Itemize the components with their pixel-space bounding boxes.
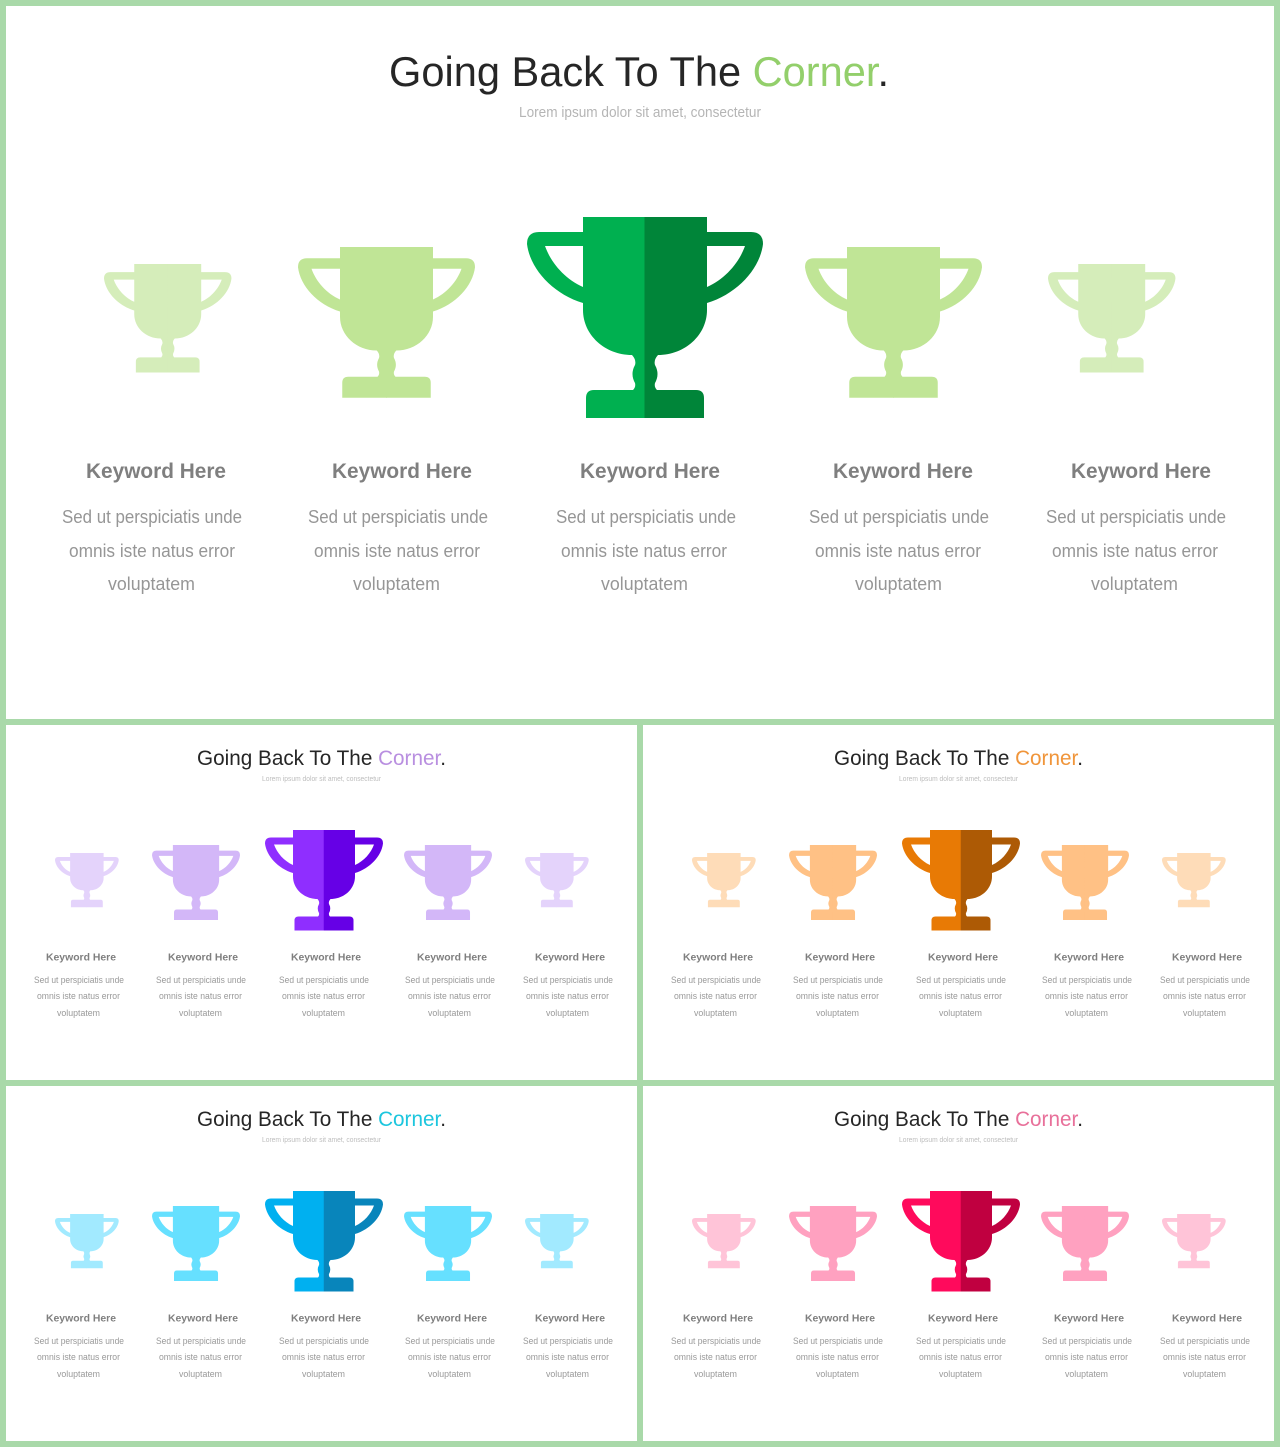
icon: large trophy centre xyxy=(265,830,383,930)
text block: column 4: Keyword Here xyxy=(1054,952,1124,964)
text block: column 3: Sed ut perspiciatis unde xyxy=(279,975,369,985)
icon: small trophy left xyxy=(692,1214,756,1268)
subtitle: Lorem ipsum dolor sit amet, consectetur xyxy=(899,1135,1018,1144)
text block: column 3: omnis iste natus error xyxy=(561,540,727,561)
text block: column 5: voluptatem xyxy=(546,1008,589,1018)
text block: column 1: voluptatem xyxy=(57,1369,100,1379)
text block: column 3 xyxy=(556,460,736,594)
text block: column 3 xyxy=(279,952,369,1018)
text block: column 5: omnis iste natus error xyxy=(1163,1352,1246,1362)
text block: column 5: Keyword Here xyxy=(535,952,605,964)
text block: column 2: Keyword Here xyxy=(168,952,238,964)
text block: column 2: omnis iste natus error xyxy=(796,991,879,1001)
icon: medium trophy left xyxy=(789,845,877,920)
text block: column 4 xyxy=(1042,1312,1132,1379)
text block: column 4: omnis iste natus error xyxy=(1045,1352,1128,1362)
text block: column 1: omnis iste natus error xyxy=(69,540,235,561)
text block: column 4: Keyword Here xyxy=(417,1312,487,1324)
text block: column 3: Sed ut perspiciatis unde xyxy=(916,1336,1006,1346)
text block: column 2: Keyword Here xyxy=(168,1312,238,1324)
text block: column 2: Keyword Here xyxy=(332,460,472,483)
text block: column 4 xyxy=(809,460,989,594)
text block: column 3: omnis iste natus error xyxy=(282,991,365,1001)
text block: column 4: omnis iste natus error xyxy=(408,1352,491,1362)
text block: column 1: Sed ut perspiciatis unde xyxy=(671,1336,761,1346)
text block: column 3: omnis iste natus error xyxy=(919,991,1002,1001)
panel: main green slide xyxy=(6,6,1274,719)
icon: medium trophy left xyxy=(298,247,475,398)
title: Going Back To The Corner. xyxy=(389,48,889,95)
text block: column 3: Keyword Here xyxy=(291,1312,361,1324)
text block: column 2: voluptatem xyxy=(353,573,440,594)
text block: column 4 xyxy=(405,1312,495,1379)
text block: column 4: Keyword Here xyxy=(833,460,973,483)
text block: column 3: Keyword Here xyxy=(580,460,720,483)
text block: column 5: Keyword Here xyxy=(535,1312,605,1324)
text block: column 2 xyxy=(156,1312,246,1379)
text block: column 1: Keyword Here xyxy=(46,1312,116,1324)
text block: column 4 xyxy=(405,952,495,1018)
panel: purple slide xyxy=(6,725,637,1080)
text block: column 2: voluptatem xyxy=(816,1008,859,1018)
text block: column 3 xyxy=(916,952,1006,1018)
text block: column 1 xyxy=(671,1312,761,1379)
text block: column 2: voluptatem xyxy=(179,1369,222,1379)
icon: medium trophy left xyxy=(789,1206,877,1281)
text block: column 1: Sed ut perspiciatis unde xyxy=(34,975,124,985)
text block: column 1: Keyword Here xyxy=(86,460,226,483)
icon: small trophy right xyxy=(1162,853,1226,907)
text block: column 4: voluptatem xyxy=(1065,1369,1108,1379)
title: Going Back To The Corner. xyxy=(197,747,446,770)
text block: column 3: omnis iste natus error xyxy=(282,1352,365,1362)
panel: orange slide xyxy=(643,725,1274,1080)
text block: column 4: omnis iste natus error xyxy=(815,540,981,561)
text block: column 4: Sed ut perspiciatis unde xyxy=(405,1336,495,1346)
text block: column 2 xyxy=(793,952,883,1018)
icon: large trophy centre xyxy=(902,1191,1020,1292)
text block: column 5 xyxy=(1046,460,1226,594)
icon: large trophy centre xyxy=(527,217,763,418)
text block: column 3: Keyword Here xyxy=(291,952,361,964)
text block: column 1: omnis iste natus error xyxy=(674,991,757,1001)
text block: column 4: Sed ut perspiciatis unde xyxy=(1042,1336,1132,1346)
text block: column 3 xyxy=(916,1312,1006,1379)
text block: column 1: voluptatem xyxy=(694,1008,737,1018)
icon: small trophy left xyxy=(692,853,756,907)
text block: column 4: Keyword Here xyxy=(417,952,487,964)
icon: medium trophy right xyxy=(404,1206,492,1281)
icon: medium trophy right xyxy=(1041,845,1129,920)
text block: column 5: omnis iste natus error xyxy=(1052,540,1218,561)
text block: column 5: omnis iste natus error xyxy=(526,991,609,1001)
text block: column 4: omnis iste natus error xyxy=(408,991,491,1001)
subtitle: Lorem ipsum dolor sit amet, consectetur xyxy=(262,774,381,783)
icon: large trophy centre xyxy=(265,1191,383,1292)
text block: column 4: Keyword Here xyxy=(1054,1312,1124,1324)
text block: column 2: voluptatem xyxy=(179,1008,222,1018)
text block: column 4: Sed ut perspiciatis unde xyxy=(809,506,989,527)
text block: column 3: Sed ut perspiciatis unde xyxy=(916,975,1006,985)
text block: column 1 xyxy=(671,952,761,1018)
text block: column 2: omnis iste natus error xyxy=(159,991,242,1001)
text block: column 4: voluptatem xyxy=(1065,1008,1108,1018)
text block: column 5: voluptatem xyxy=(1183,1369,1226,1379)
text block: column 2: Sed ut perspiciatis unde xyxy=(308,506,488,527)
text block: column 3: voluptatem xyxy=(939,1008,982,1018)
title: Going Back To The Corner. xyxy=(834,747,1083,770)
title: Going Back To The Corner. xyxy=(834,1108,1083,1131)
text block: column 2 xyxy=(793,1312,883,1379)
text block: column 5 xyxy=(1160,1312,1250,1379)
text block: column 5: Sed ut perspiciatis unde xyxy=(1160,1336,1250,1346)
text block: column 5: Keyword Here xyxy=(1172,1312,1242,1324)
text block: column 2: omnis iste natus error xyxy=(796,1352,879,1362)
text block: column 2: voluptatem xyxy=(816,1369,859,1379)
text block: column 2: Sed ut perspiciatis unde xyxy=(156,975,246,985)
icon: medium trophy left xyxy=(152,845,240,920)
panel: pink slide xyxy=(643,1086,1274,1441)
text block: column 5: Keyword Here xyxy=(1071,460,1211,483)
text block: column 2 xyxy=(308,460,488,594)
text block: column 2: omnis iste natus error xyxy=(159,1352,242,1362)
text block: column 4: Sed ut perspiciatis unde xyxy=(405,975,495,985)
text block: column 4 xyxy=(1042,952,1132,1018)
icon: small trophy left xyxy=(55,853,119,907)
text block: column 5: Sed ut perspiciatis unde xyxy=(523,1336,613,1346)
text block: column 5: omnis iste natus error xyxy=(526,1352,609,1362)
text block: column 1 xyxy=(34,952,124,1018)
text block: column 3: Sed ut perspiciatis unde xyxy=(279,1336,369,1346)
text block: column 1: Sed ut perspiciatis unde xyxy=(62,506,242,527)
text block: column 3: Keyword Here xyxy=(928,1312,998,1324)
text block: column 2 xyxy=(156,952,246,1018)
title: Going Back To The Corner. xyxy=(197,1108,446,1131)
text block: column 1 xyxy=(62,460,242,594)
text block: column 1: Keyword Here xyxy=(683,1312,753,1324)
icon: small trophy left xyxy=(55,1214,119,1268)
text block: column 1: Keyword Here xyxy=(683,952,753,964)
text block: column 3: Sed ut perspiciatis unde xyxy=(556,506,736,527)
text block: column 2: Sed ut perspiciatis unde xyxy=(793,1336,883,1346)
icon: small trophy left xyxy=(104,264,231,373)
text block: column 1 xyxy=(34,1312,124,1379)
subtitle: Lorem ipsum dolor sit amet, consectetur xyxy=(899,774,1018,783)
text block: column 1: voluptatem xyxy=(57,1008,100,1018)
text block: column 5: Sed ut perspiciatis unde xyxy=(1160,975,1250,985)
icon: large trophy centre xyxy=(902,830,1020,930)
text block: column 1: omnis iste natus error xyxy=(37,991,120,1001)
text block: column 4: voluptatem xyxy=(428,1369,471,1379)
text block: column 3: voluptatem xyxy=(302,1008,345,1018)
icon: small trophy right xyxy=(1162,1214,1226,1268)
icon: medium trophy left xyxy=(152,1206,240,1281)
text block: column 3: Keyword Here xyxy=(928,952,998,964)
icon: medium trophy right xyxy=(805,247,982,398)
icon: small trophy right xyxy=(525,1214,589,1268)
text block: column 1: Keyword Here xyxy=(46,952,116,964)
subtitle: Lorem ipsum dolor sit amet, consectetur xyxy=(262,1135,381,1144)
text block: column 1: Sed ut perspiciatis unde xyxy=(671,975,761,985)
text block: column 1: omnis iste natus error xyxy=(37,1352,120,1362)
text block: column 5: voluptatem xyxy=(546,1369,589,1379)
text block: column 4: voluptatem xyxy=(855,573,942,594)
text block: column 2: Keyword Here xyxy=(805,952,875,964)
subtitle: Lorem ipsum dolor sit amet, consectetur xyxy=(519,104,761,121)
text block: column 3: voluptatem xyxy=(601,573,688,594)
text block: column 1: omnis iste natus error xyxy=(674,1352,757,1362)
text block: column 1: Sed ut perspiciatis unde xyxy=(34,1336,124,1346)
icon: medium trophy right xyxy=(404,845,492,920)
text block: column 4: Sed ut perspiciatis unde xyxy=(1042,975,1132,985)
text block: column 1: voluptatem xyxy=(694,1369,737,1379)
icon: medium trophy right xyxy=(1041,1206,1129,1281)
text block: column 4: voluptatem xyxy=(428,1008,471,1018)
text block: column 4: omnis iste natus error xyxy=(1045,991,1128,1001)
text block: column 5: Keyword Here xyxy=(1172,952,1242,964)
text block: column 2: Sed ut perspiciatis unde xyxy=(793,975,883,985)
text block: column 1: voluptatem xyxy=(108,573,195,594)
panel: cyan slide xyxy=(6,1086,637,1441)
text block: column 2: Keyword Here xyxy=(805,1312,875,1324)
text block: column 5: Sed ut perspiciatis unde xyxy=(523,975,613,985)
icon: small trophy right xyxy=(525,853,589,907)
text block: column 3 xyxy=(279,1312,369,1379)
text block: column 5: Sed ut perspiciatis unde xyxy=(1046,506,1226,527)
text block: column 3: omnis iste natus error xyxy=(919,1352,1002,1362)
icon: small trophy right xyxy=(1048,264,1175,373)
text block: column 5: voluptatem xyxy=(1091,573,1178,594)
text block: column 2: omnis iste natus error xyxy=(314,540,480,561)
text block: column 5: voluptatem xyxy=(1183,1008,1226,1018)
text block: column 5 xyxy=(1160,952,1250,1018)
text block: column 2: Sed ut perspiciatis unde xyxy=(156,1336,246,1346)
text block: column 3: voluptatem xyxy=(939,1369,982,1379)
text block: column 3: voluptatem xyxy=(302,1369,345,1379)
text block: column 5 xyxy=(523,1312,613,1379)
text block: column 5: omnis iste natus error xyxy=(1163,991,1246,1001)
text block: column 5 xyxy=(523,952,613,1018)
